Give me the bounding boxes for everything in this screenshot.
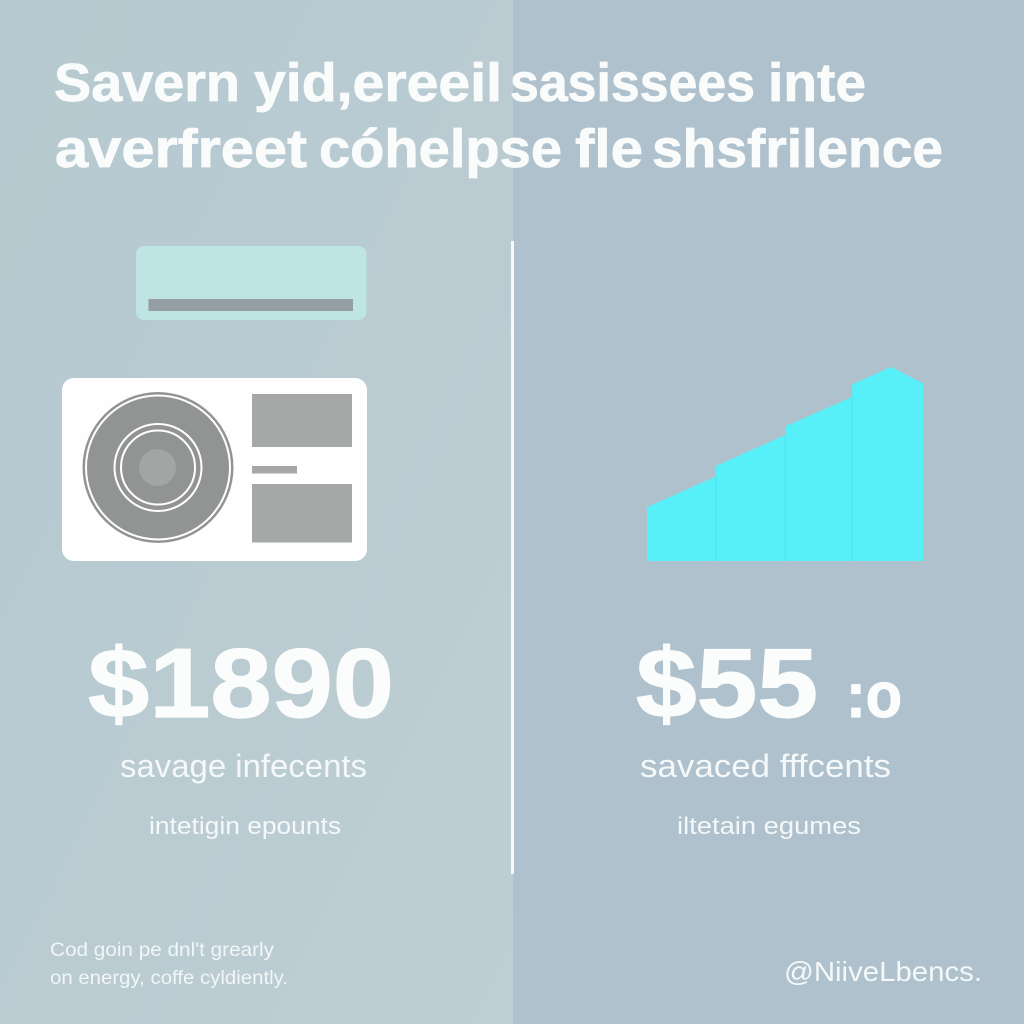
right stat: amount: $55 (636, 628, 818, 738)
brand handle: @NiiveLbencs. (784, 956, 982, 987)
footnote: on energy, coffe cyldiently. (50, 968, 288, 989)
left stat: sublabel: intetigin epounts (149, 813, 341, 840)
panel: right background (513, 0, 1024, 1024)
chart: rising savings bars (647, 367, 923, 561)
title (54, 53, 943, 179)
right stat: amount: :o (846, 659, 902, 731)
right stat: sublabel: iltetain egumes (677, 813, 861, 840)
right stat: amount (636, 628, 902, 738)
icon: indoor air conditioner unit (136, 246, 366, 320)
title: averfreet (55, 119, 307, 179)
left stat: amount: $1890 (88, 628, 394, 738)
title: cóhelpse (319, 119, 562, 179)
title: shsfrilence (652, 119, 943, 179)
left stat: label: savage infecents (120, 748, 367, 784)
title: fle (575, 119, 643, 179)
divider (511, 241, 514, 874)
title: Savern (54, 53, 240, 113)
title: inte (768, 53, 866, 113)
right stat: label: savaced fffcents (640, 748, 891, 784)
panel: left background (0, 0, 513, 1024)
title: sasissees (510, 53, 755, 113)
title: yid,ereeil (254, 53, 502, 113)
footnote (50, 940, 288, 989)
icon: outdoor air conditioner unit (62, 378, 367, 561)
footnote: Cod goin pe dnl't grearly (50, 940, 275, 961)
